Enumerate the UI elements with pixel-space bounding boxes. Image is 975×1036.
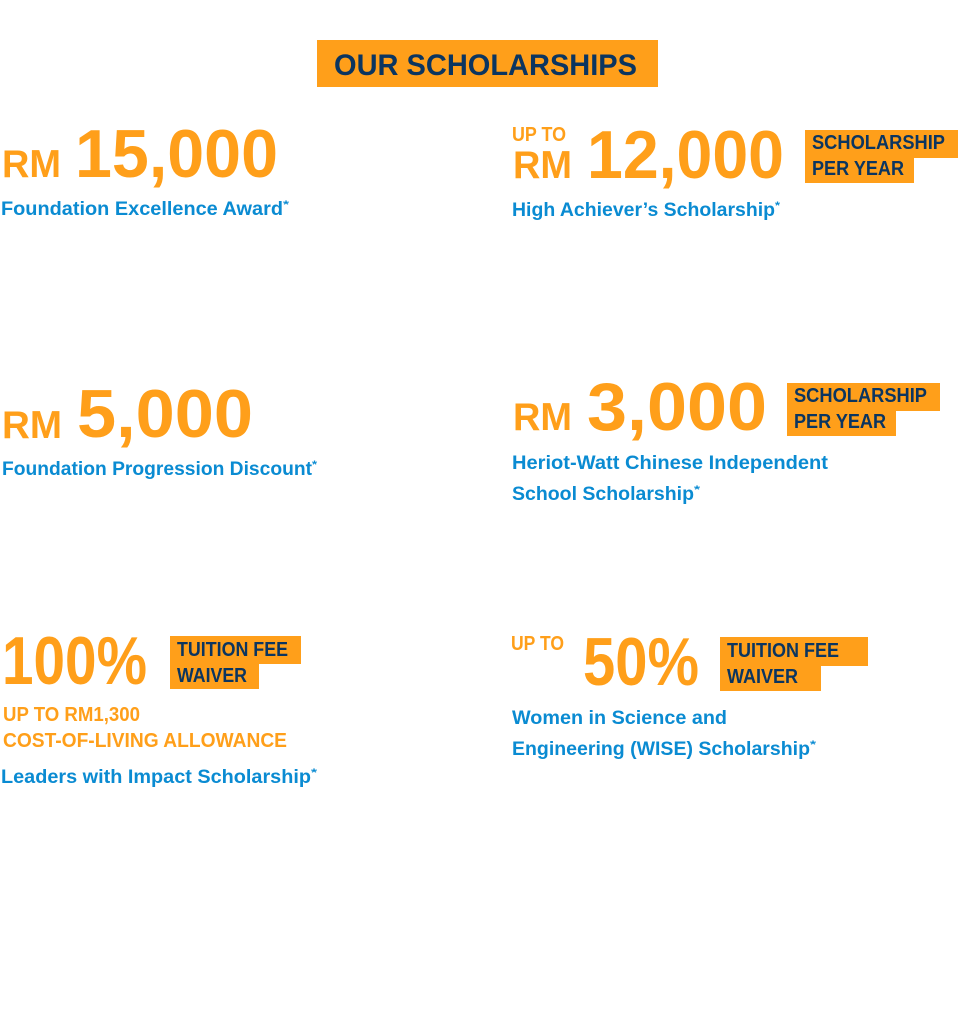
title: [317, 40, 658, 87]
scholarship name: Engineering (WISE) Scholarship: [512, 739, 810, 760]
panel: high achiever's scholarship: [512, 117, 958, 221]
tag: tuition fee waiver: TUITION FEE: [177, 639, 288, 661]
scholarship name: [512, 708, 817, 760]
title: OUR SCHOLARSHIPS: [334, 49, 637, 82]
scholarship name: *: [283, 199, 290, 211]
tag: tuition fee waiver: WAIVER: [727, 666, 798, 688]
amount: up to 50%: [511, 624, 699, 700]
tag: scholarship per year: [805, 130, 958, 183]
panel: WISE scholarship: [511, 624, 868, 760]
panel: foundation progression discount: [2, 376, 318, 480]
amount: RM 15,000: 15,000: [75, 116, 278, 192]
tag: scholarship per year: SCHOLARSHIP: [794, 385, 927, 407]
amount: RM 5,000: RM: [2, 404, 62, 447]
amount: up to RM 12,000: RM: [513, 144, 572, 187]
amount: up to RM 12,000: UP TO: [512, 124, 566, 146]
amount: RM 3,000: RM: [513, 396, 572, 439]
tag: tuition fee waiver: [170, 636, 301, 689]
scholarship name: Foundation Excellence Award: [1, 199, 283, 220]
scholarship name: *: [694, 484, 701, 496]
scholarship name: *: [775, 200, 781, 212]
panel: chinese independent school scholarship: [512, 369, 940, 505]
tag: scholarship per year: SCHOLARSHIP: [812, 132, 945, 154]
amount: up to RM 12,000: [512, 117, 784, 193]
scholarship name: High Achiever’s Scholarship: [512, 200, 775, 221]
amount: RM 5,000: [2, 376, 253, 452]
amount: RM 5,000: 5,000: [77, 376, 253, 452]
amount: 100%: 100%: [2, 623, 147, 699]
tag: tuition fee waiver: [720, 637, 868, 691]
tag: tuition fee waiver: WAIVER: [177, 665, 247, 687]
scholarship name: School Scholarship: [512, 484, 694, 505]
amount: up to RM 12,000: 12,000: [587, 117, 784, 193]
amount: RM 3,000: 3,000: [587, 369, 767, 445]
allowance text: [3, 704, 287, 752]
amount: up to 50%: 50%: [583, 624, 699, 700]
scholarship name: Women in Science and: [512, 708, 727, 729]
amount: RM 15,000: RM: [2, 143, 61, 186]
allowance text: COST-OF-LIVING ALLOWANCE: [3, 730, 287, 752]
panel: leaders with impact scholarship: [1, 623, 318, 788]
scholarship name: *: [311, 767, 318, 779]
allowance text: UP TO RM1,300: [3, 704, 140, 726]
tag: scholarship per year: [787, 383, 940, 436]
scholarship name: Foundation Progression Discount: [2, 459, 313, 480]
panel: foundation excellence award: [1, 116, 290, 220]
scholarship name: Leaders with Impact Scholarship: [1, 767, 311, 788]
scholarship name: *: [312, 459, 318, 471]
scholarship name: Heriot-Watt Chinese Independent: [512, 453, 829, 474]
amount: up to 50%: UP TO: [511, 633, 564, 655]
tag: scholarship per year: PER YEAR: [794, 411, 886, 433]
scholarship name: [512, 453, 829, 505]
tag: tuition fee waiver: TUITION FEE: [727, 640, 839, 662]
amount: RM 3,000: [513, 369, 767, 445]
scholarship name: *: [810, 739, 817, 751]
tag: scholarship per year: PER YEAR: [812, 158, 904, 180]
